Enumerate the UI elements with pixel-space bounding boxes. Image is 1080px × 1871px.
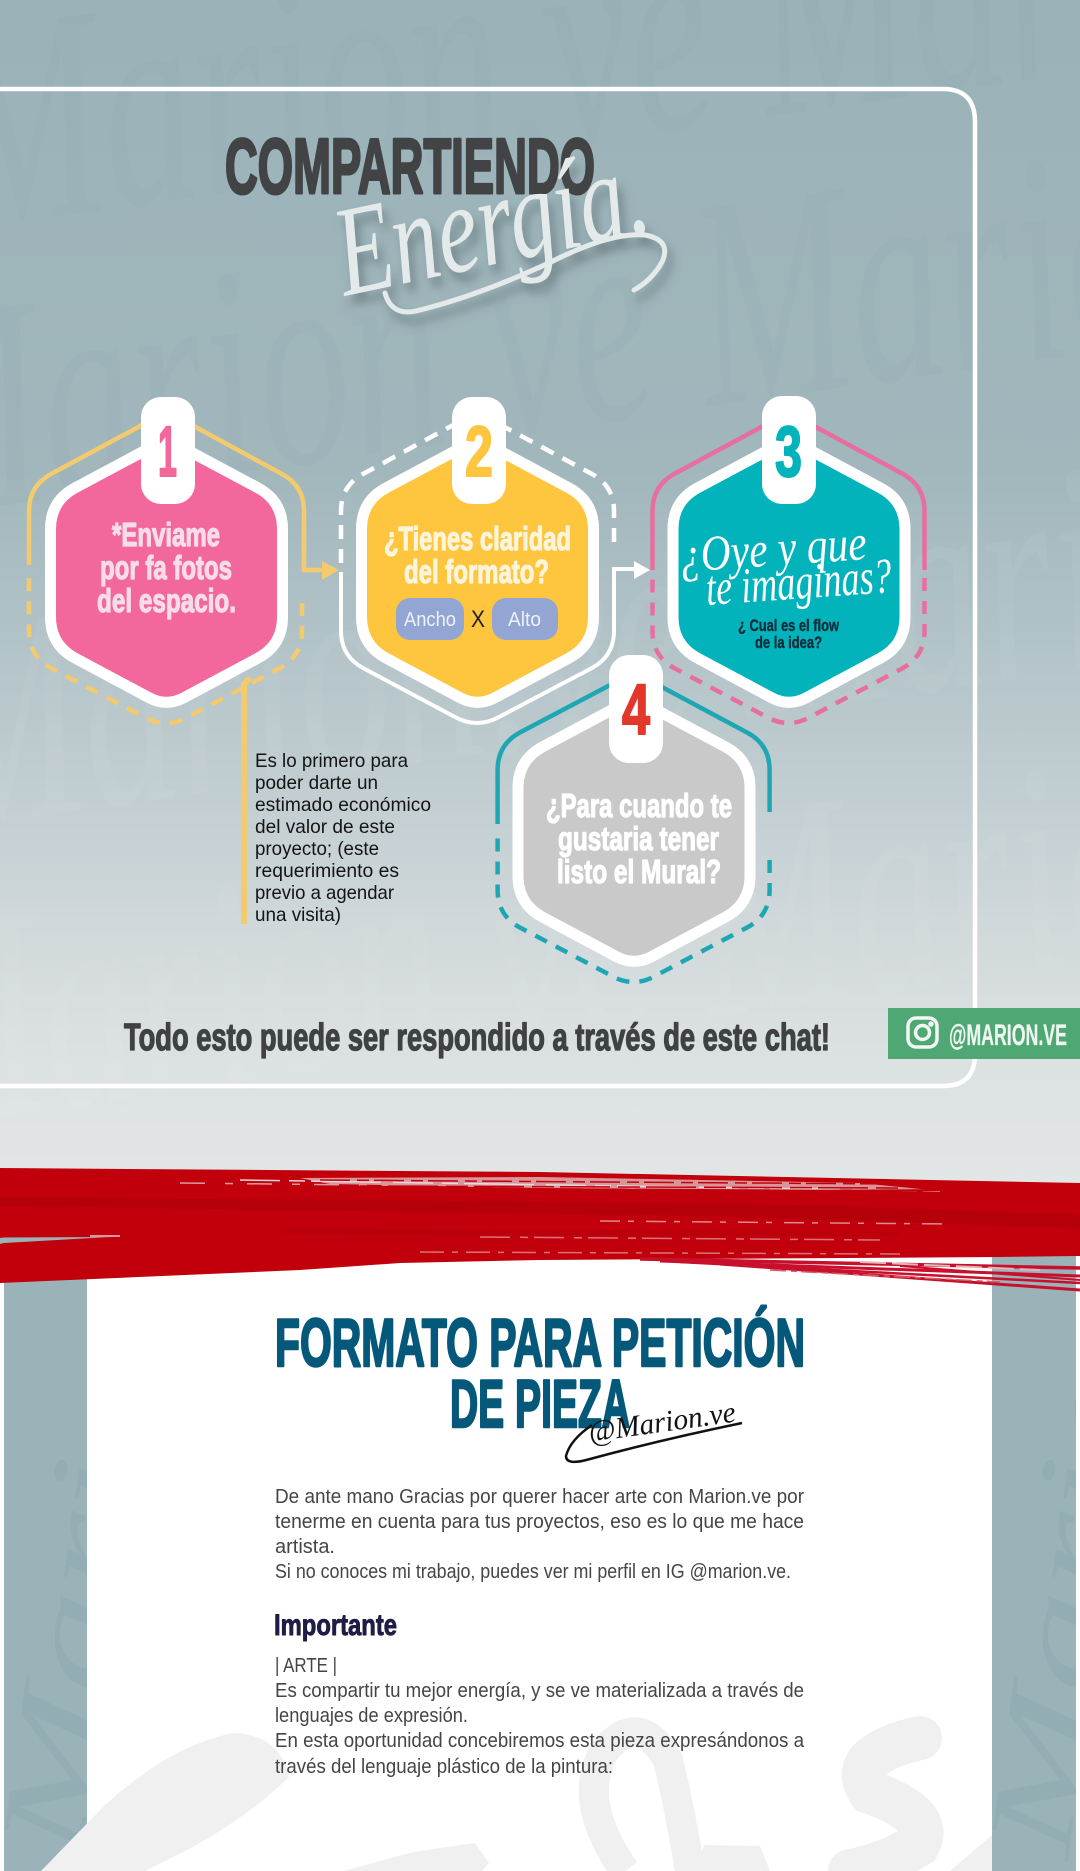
section heading <box>275 1305 805 1442</box>
outline solid top <box>652 425 924 570</box>
instagram badge <box>888 1008 1080 1059</box>
red brush stroke <box>0 1168 1080 1290</box>
heading: Compartiendo: COMPARTIENDO <box>225 122 595 210</box>
intro paragraph: De ante mano Gracias por querer hacer arte con Marion.ve por <box>275 1486 804 1508</box>
request text <box>97 516 236 619</box>
art paragraph <box>275 1655 805 1778</box>
hexagon <box>50 444 282 702</box>
step 2: format hexagon <box>341 397 650 723</box>
number 4: 4 <box>622 671 650 750</box>
art paragraph: través del lenguaje plástico de la pintura: <box>275 1756 613 1778</box>
side watermarks <box>21 1462 1073 1862</box>
script question <box>678 514 893 616</box>
question text <box>384 520 571 590</box>
arrow to step 2 <box>322 561 339 580</box>
intro paragraph <box>275 1486 804 1583</box>
outline solid top <box>498 684 770 824</box>
note text: una visita) <box>255 904 341 926</box>
background watermark <box>0 0 1080 1195</box>
outline solid top <box>29 424 322 570</box>
number tab <box>609 655 663 763</box>
note text: previo a agendar <box>255 882 394 904</box>
note text: proyecto; (este <box>255 838 379 860</box>
question text: ¿Para cuando te <box>546 787 732 824</box>
outline dashed bottom <box>29 578 302 723</box>
page background <box>0 0 1080 1240</box>
callout: first step note <box>244 678 431 926</box>
note text <box>255 750 431 926</box>
pill: Alto <box>492 598 558 640</box>
art paragraph: lenguajes de expresión. <box>275 1705 468 1727</box>
art paragraph: Es compartir tu mejor energía, y se ve materializada a través de <box>275 1680 804 1702</box>
brush notch <box>0 1237 110 1244</box>
outline solid bottom <box>341 569 634 723</box>
request text: por fa fotos <box>100 549 232 586</box>
number 2: 2 <box>465 413 493 492</box>
pale dry-brush band <box>300 1177 930 1190</box>
sub question: ¿ Cual es el flow <box>738 616 840 635</box>
question text: listo el Mural? <box>557 853 721 890</box>
intro paragraph: tenerme en cuenta para tus proyectos, eso es lo que me hace <box>275 1511 804 1533</box>
request text: del espacio. <box>97 582 236 619</box>
pill: Ancho <box>396 598 464 640</box>
question text: ¿Tienes claridad <box>384 520 571 557</box>
outline dashed bottom <box>498 836 770 982</box>
lettering: Energía <box>320 119 665 324</box>
script question: te imaginas? <box>704 547 893 616</box>
note text: Es lo primero para <box>255 750 408 772</box>
bristle streaks <box>90 1180 1080 1290</box>
lower section background <box>0 1237 1080 1871</box>
note text: estimado económico <box>255 794 431 816</box>
number tab <box>452 397 506 504</box>
number 3: 3 <box>775 413 802 492</box>
arrow to step 3 <box>634 561 650 579</box>
request text: *Enviame <box>112 516 220 553</box>
sub question <box>738 616 840 652</box>
outline dashed bottom <box>652 578 924 723</box>
icon: instagram <box>908 1018 937 1047</box>
times sign: X <box>471 606 485 633</box>
darker core <box>0 1198 1080 1228</box>
note text: poder darte un <box>255 772 378 794</box>
note text: requerimiento es <box>255 860 399 882</box>
step 1: photos hexagon <box>29 397 339 723</box>
closing sentence: Todo esto puede ser respondido a través de este chat! <box>124 1017 830 1059</box>
connector line <box>244 678 250 924</box>
rounded white frame <box>0 89 975 1086</box>
script question: ¿Oye y que <box>678 514 868 583</box>
question text: gustaria tener <box>558 820 719 857</box>
question text <box>546 787 732 890</box>
step 3: idea hexagon <box>652 396 924 723</box>
panel watermark <box>41 1732 992 1871</box>
title: Compartiendo Energía <box>225 119 665 324</box>
hexagon <box>673 444 905 702</box>
heading: Importante: Importante <box>274 1609 397 1642</box>
number tab <box>762 396 816 504</box>
outline dashed top <box>341 424 614 563</box>
section heading: DE PIEZA <box>450 1366 630 1442</box>
sub question: de la idea? <box>755 633 822 652</box>
signature: @Marion.ve <box>586 1396 738 1449</box>
question text: del formato? <box>404 553 549 590</box>
art paragraph: | ARTE | <box>275 1655 337 1677</box>
intro paragraph: artista. <box>275 1536 335 1558</box>
hexagon <box>518 703 750 961</box>
art paragraph: En esta oportunidad concebiremos esta pieza expresándonos a <box>275 1730 805 1752</box>
number tab <box>141 397 195 504</box>
step 4: deadline hexagon <box>498 655 770 982</box>
intro paragraph: Si no conoces mi trabajo, puedes ver mi perfil en IG @marion.ve. <box>275 1561 791 1583</box>
note text: del valor de este <box>255 816 395 838</box>
step 1: photos hexagon: 1 <box>158 413 177 492</box>
lettering: Energía: Energía. <box>320 119 660 324</box>
pill: Alto: Alto <box>508 609 541 631</box>
pill: Ancho: Ancho <box>404 609 456 631</box>
hexagon <box>362 444 594 702</box>
